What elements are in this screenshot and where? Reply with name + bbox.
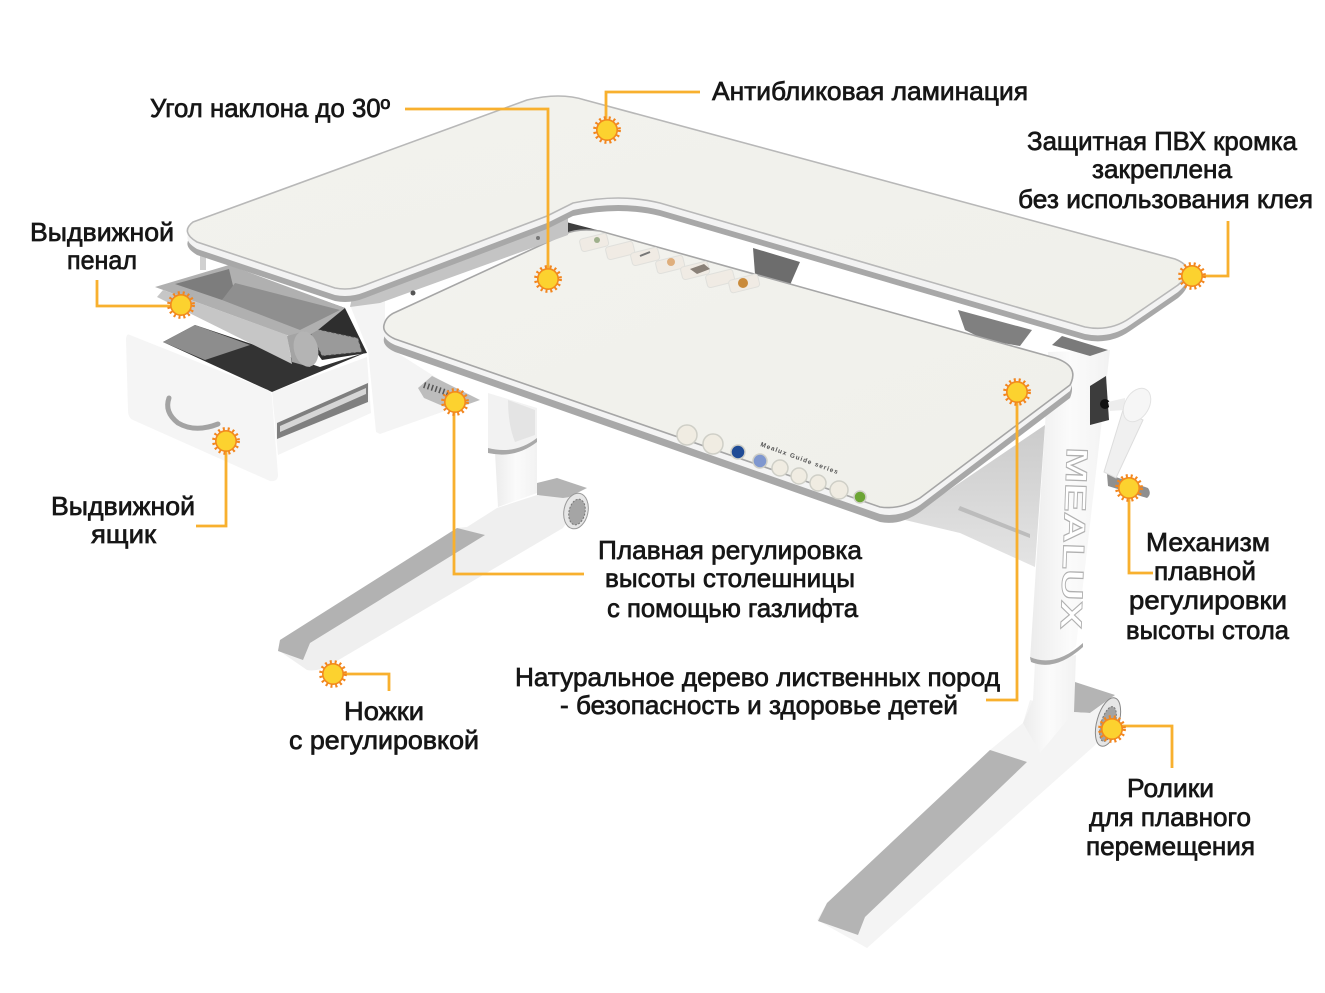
callout: gas lift: с помощью газлифта — [607, 593, 859, 623]
tray support — [200, 250, 206, 270]
upper band white — [187, 103, 1187, 335]
callout: PVC edge — [1018, 126, 1313, 288]
callout: gas lift — [443, 390, 863, 623]
callout: casters: перемещения — [1086, 831, 1255, 861]
callout: adjustable feet: с регулировкой — [289, 725, 479, 755]
callout: anti-glare lamination — [595, 76, 1028, 142]
bolts — [410, 290, 416, 296]
callout: crank mechanism: регулировки — [1129, 585, 1287, 615]
back column upper — [488, 393, 537, 452]
drawer interior — [163, 325, 367, 392]
right leg — [817, 350, 1156, 948]
right foot — [817, 695, 1115, 948]
callout: drawer — [51, 429, 238, 549]
callout: gas lift: высоты столешницы — [605, 563, 855, 593]
stickers row top — [579, 233, 760, 293]
upper table top — [187, 96, 1187, 341]
gas lift mechanism — [418, 376, 480, 410]
tray rail — [233, 268, 367, 360]
dark support behind top — [566, 222, 1108, 356]
callout: adjustable feet: Ножки — [344, 696, 424, 726]
callout: crank mechanism: плавной — [1154, 556, 1256, 586]
callout: PVC edge: без использования клея — [1018, 184, 1313, 214]
back foot rear cap — [537, 478, 587, 500]
back foot grey inset — [278, 528, 485, 660]
upper band grey — [187, 109, 1187, 341]
callout: casters: для плавного — [1089, 802, 1251, 832]
callout: tilt angle: Угол наклона до 30º — [150, 93, 390, 123]
lower surface — [384, 230, 1073, 508]
right foot grey inset — [818, 750, 1027, 935]
drawer side — [272, 357, 371, 455]
apron under lower top — [905, 425, 1045, 567]
callout: pencil tray: пенал — [67, 245, 137, 275]
drawer block support — [350, 298, 476, 434]
drawer rail — [277, 383, 368, 439]
right wheel — [1091, 695, 1125, 749]
column ring — [1030, 643, 1083, 665]
outer column — [1030, 350, 1110, 662]
back column ring — [488, 438, 537, 455]
callout: PVC edge: закреплена — [1092, 154, 1233, 184]
callout: drawer: Выдвижной — [51, 491, 195, 521]
callout: pencil tray: Выдвижной — [30, 217, 174, 247]
tray body — [155, 265, 345, 340]
tray front bar — [157, 290, 292, 364]
crank mount — [1090, 376, 1109, 425]
callout: casters: Ролики — [1127, 773, 1214, 803]
sticker caption: Mealux Guide series — [759, 441, 839, 476]
back leg — [278, 393, 591, 670]
callout: tilt angle — [150, 93, 560, 291]
callout: natural wood: Натуральное дерево лиственных пород — [515, 662, 1000, 692]
back wheel — [561, 491, 591, 531]
callout: PVC edge: Защитная ПВХ кромка — [1027, 126, 1298, 156]
drawer — [126, 325, 371, 481]
MEALUX logo: MEALUX — [1054, 447, 1093, 630]
callout: drawer: ящик — [91, 519, 157, 549]
lower band grey — [384, 243, 1072, 523]
sticker pictograms — [594, 237, 748, 288]
callout: natural wood — [515, 380, 1029, 720]
callout: adjustable feet — [289, 662, 479, 755]
right foot rear cap — [1072, 682, 1115, 713]
tray cylinder end — [287, 331, 318, 367]
crank handle — [1104, 383, 1156, 498]
upper surface — [187, 96, 1187, 328]
callout: pencil tray — [30, 217, 193, 317]
callout: anti-glare lamination: Антибликовая ламинация — [712, 76, 1028, 106]
back column lower — [495, 440, 537, 507]
stickers row bottom — [677, 425, 866, 503]
drawer front panel — [126, 335, 278, 481]
lower table top — [384, 230, 1073, 523]
drawer handle — [168, 398, 218, 428]
upper top underside strip — [350, 215, 568, 307]
callout: gas lift: Плавная регулировка — [598, 535, 863, 565]
lower band white — [384, 236, 1072, 515]
callout: crank mechanism: Механизм — [1146, 527, 1270, 557]
callout: crank mechanism — [1117, 476, 1290, 645]
callout: natural wood: - безопасность и здоровье детей — [560, 690, 958, 720]
callout: crank mechanism: высоты стола — [1126, 615, 1290, 645]
back foot — [278, 495, 585, 670]
pen tray — [155, 250, 367, 369]
inner column — [1023, 655, 1076, 753]
callout: casters — [1086, 717, 1255, 861]
